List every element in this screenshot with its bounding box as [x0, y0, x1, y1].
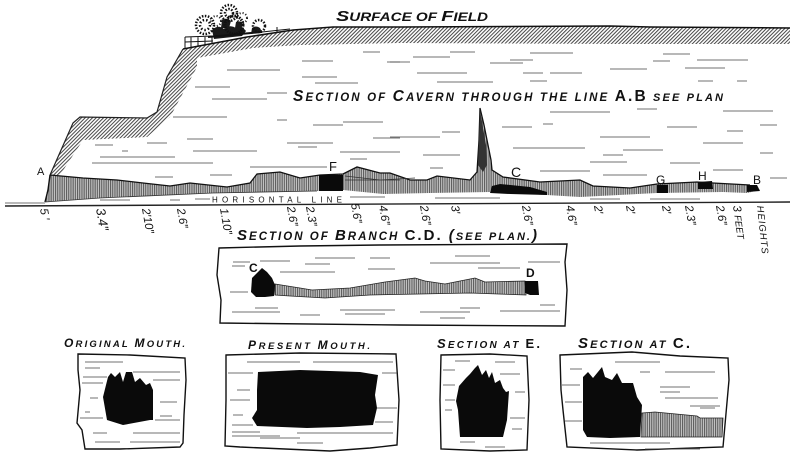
fence [185, 27, 290, 48]
horizontal line: HORISONTAL LINE [212, 196, 342, 204]
panel: section of branch C.D. [217, 244, 567, 326]
point labels [37, 159, 761, 187]
height measurements [37, 202, 770, 255]
panel: present mouth [225, 353, 399, 451]
height measurements: 4.6″ [376, 204, 392, 227]
height measurements: 2.6″ [174, 206, 190, 230]
height measurements: 4.6″ [563, 204, 579, 227]
height measurements: 3′ [448, 204, 461, 216]
opening [583, 367, 642, 438]
height measurements: 3 FEET [730, 205, 747, 241]
height measurements: 2′10″ [139, 206, 155, 235]
heading: present mouth: P RESENT M OUTH. [248, 338, 370, 352]
point labels: F [329, 159, 337, 174]
height measurements: 2.6″ [284, 204, 300, 228]
panel: section at E [440, 354, 529, 451]
horizontal line [5, 196, 790, 206]
height measurements: 2.6″ [417, 203, 433, 227]
heading: section at E: SECTION AT E. [437, 336, 540, 351]
point labels: H [698, 169, 707, 183]
height measurements: 2′ [659, 203, 672, 216]
panel: section at C [560, 352, 729, 450]
point labels: C [511, 164, 521, 180]
cliff hatched band [50, 26, 790, 175]
chamber C [251, 268, 275, 297]
height measurements: 2.6″ [713, 203, 729, 227]
heading: section at C: SECTION AT C. [578, 335, 690, 352]
rock strata dashes [92, 52, 787, 200]
panel: original mouth [77, 354, 186, 449]
height measurements: 2.6″ [519, 203, 535, 227]
heading: section of branch: SECTION OF BRANCH C.D. (SEE PLAN.) [237, 227, 537, 244]
panel: section of branch C.D.: C [249, 261, 258, 275]
height measurements: 2.3″ [682, 203, 698, 227]
heading: original mouth: ORIGINAL MOUTH. [64, 336, 185, 350]
point labels: A [37, 166, 45, 178]
height measurements: 2′ [591, 203, 604, 216]
heading: surface of field: S URFACE OF F IELD [336, 8, 488, 25]
gray passage [641, 412, 723, 437]
height measurements: 1.10″ [217, 207, 234, 236]
main cavern section band [45, 108, 760, 202]
height measurements: 2.3″ [303, 204, 319, 228]
opening [103, 372, 153, 425]
trees on cliff top [196, 5, 265, 39]
black chambers: F, C, G, H, B [319, 175, 760, 195]
opening [252, 370, 378, 428]
panel: section of branch C.D.: D [526, 266, 535, 280]
chamber D [525, 281, 539, 295]
heading: section of cavern: SECTION OF CAVERN THROUGH THE LINE A.B SEE PLAN [293, 88, 724, 105]
height measurements: 2′ [623, 203, 636, 216]
height measurements: 5 ′ [37, 207, 51, 222]
height measurements: HEIGHTS [754, 205, 770, 255]
height measurements: 5.6″ [348, 202, 364, 225]
opening [456, 365, 509, 437]
height measurements: 3.4″ [93, 207, 112, 232]
point labels: G [656, 173, 665, 187]
point labels: B [753, 173, 761, 187]
